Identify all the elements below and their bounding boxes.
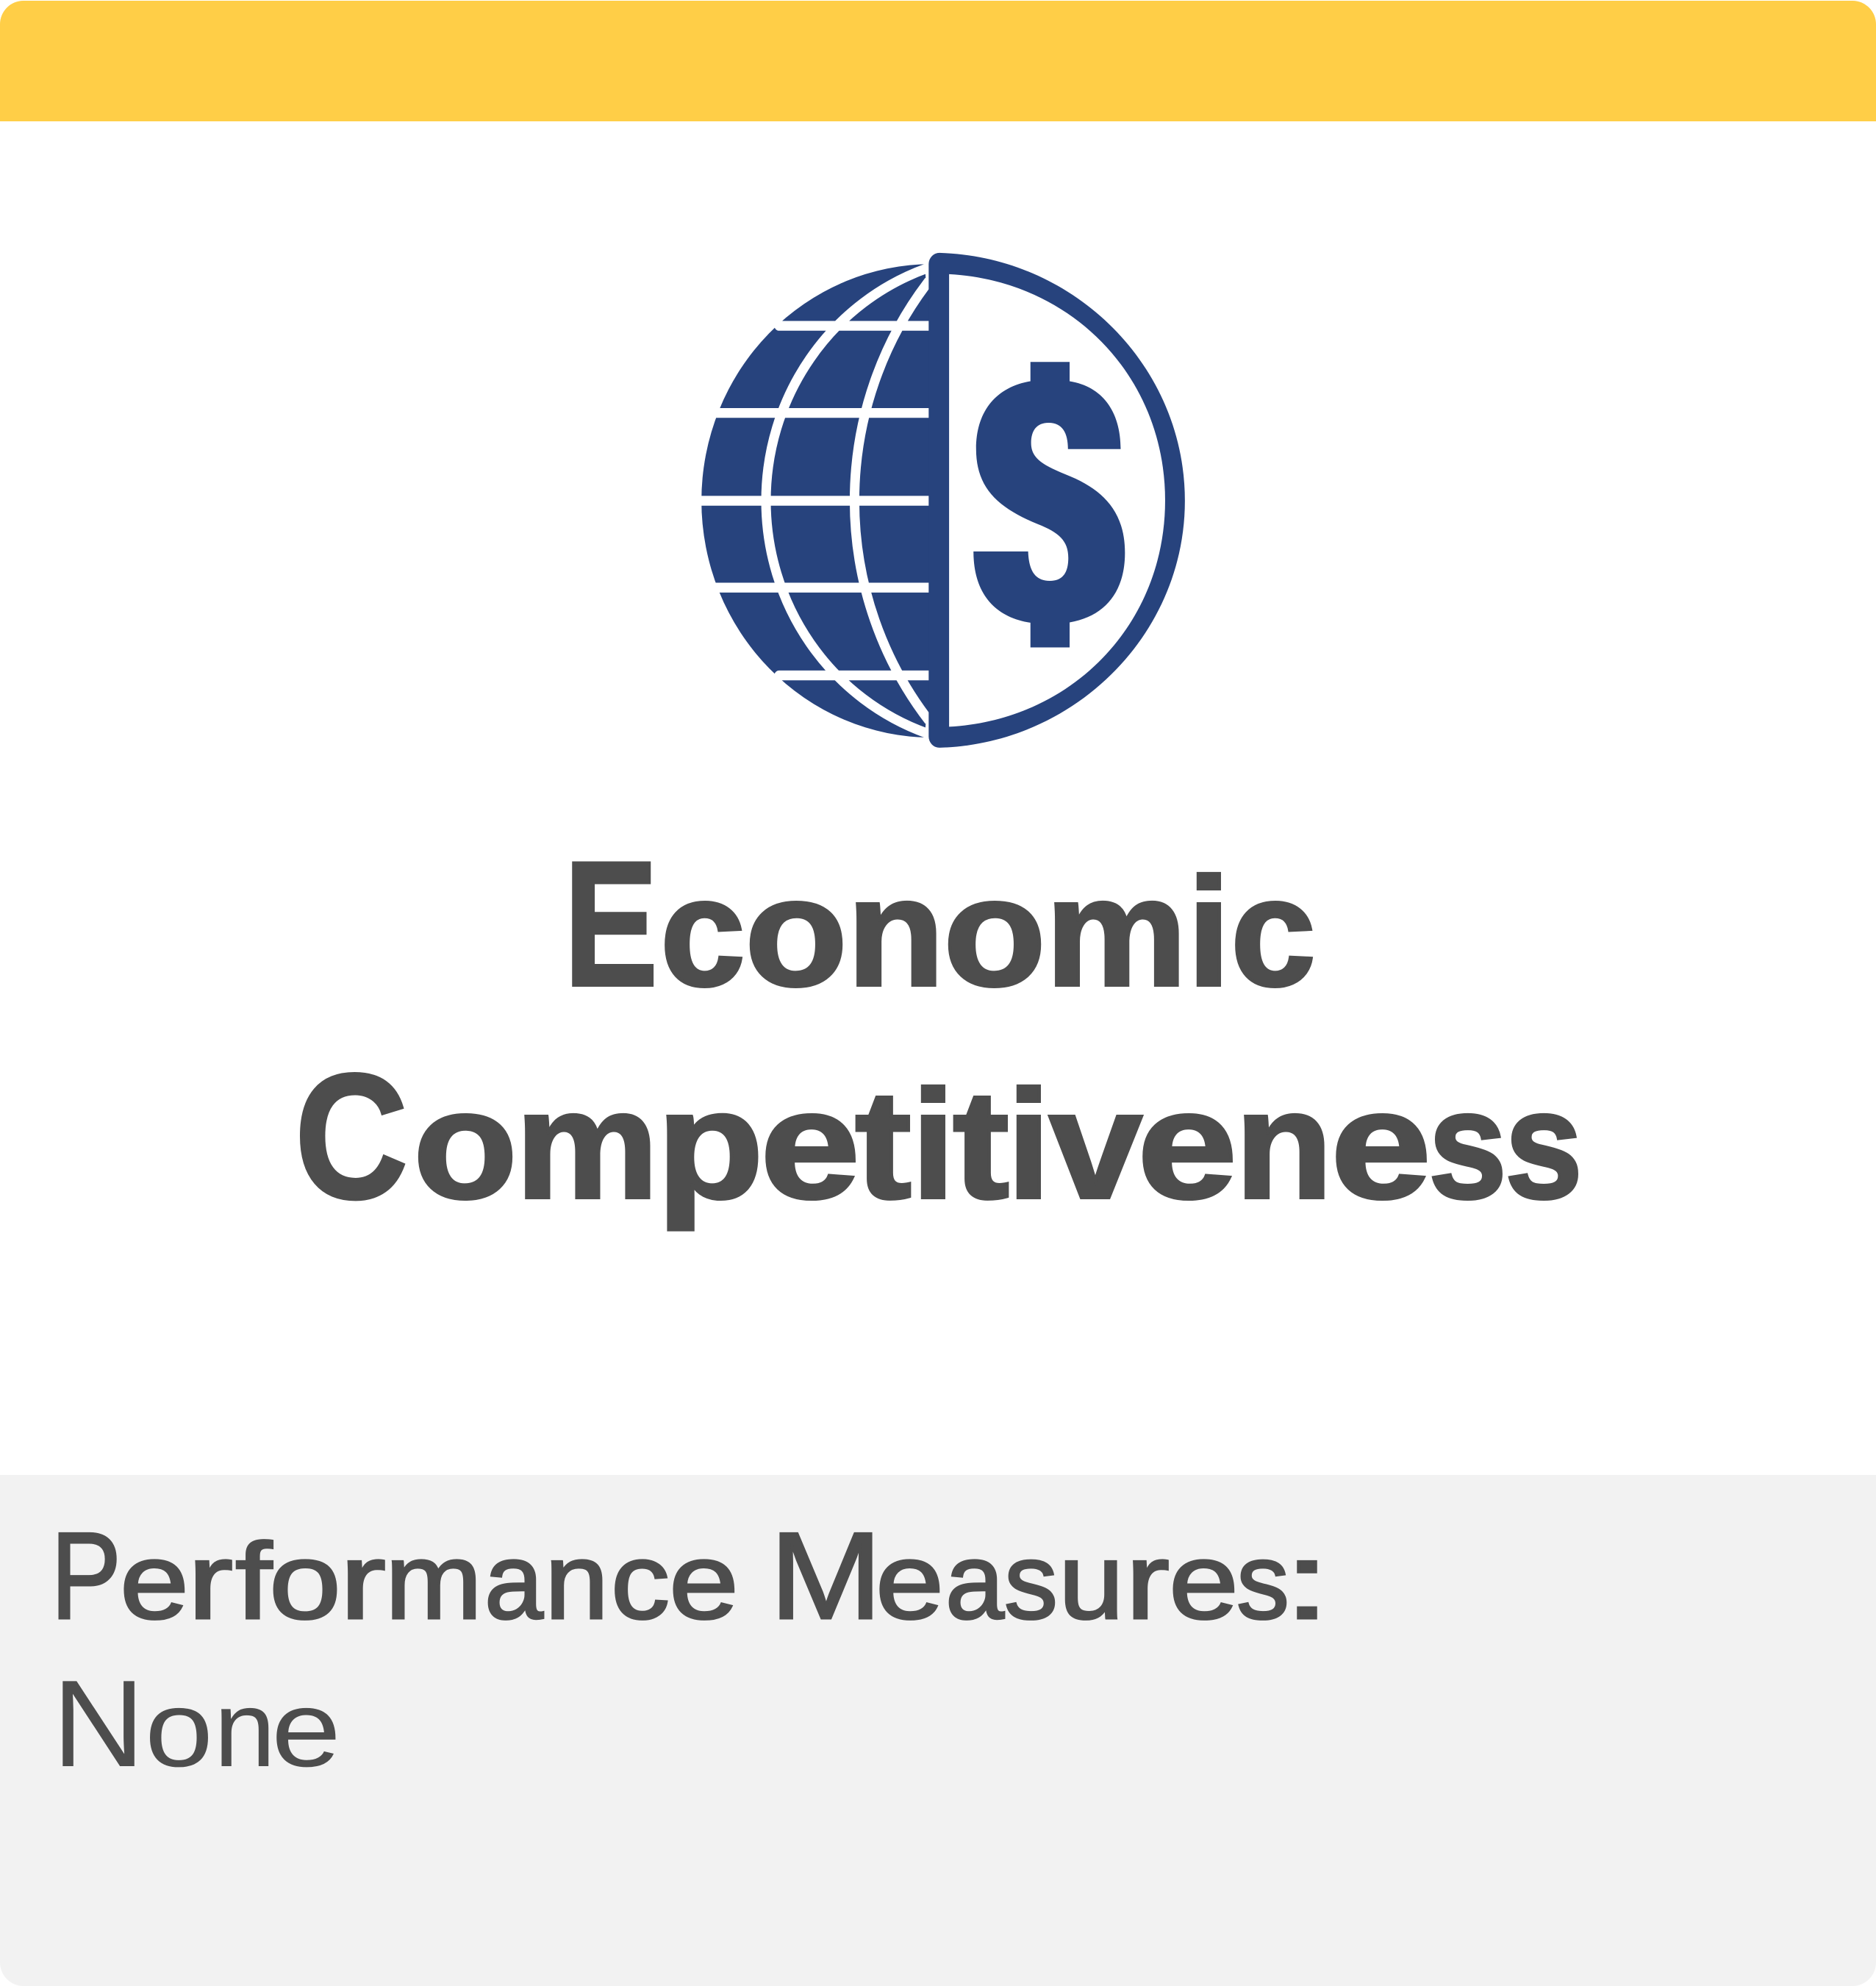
performance measures text: P (51, 1507, 121, 1645)
performance measures text: s (1004, 1521, 1058, 1642)
dollar sign (973, 362, 1125, 647)
performance measures text: r (1125, 1521, 1170, 1642)
coin half (928, 253, 1185, 748)
title: c (1231, 846, 1316, 1018)
title: C (295, 1037, 408, 1236)
title: p (656, 1058, 764, 1231)
performance measures text: a (945, 1521, 1004, 1642)
performance measures text: n (545, 1521, 609, 1642)
performance measures text: e (669, 1521, 739, 1642)
title: o (943, 846, 1046, 1018)
performance measures text: r (340, 1521, 386, 1642)
title: m (515, 1058, 659, 1231)
performance measures text: e (271, 1669, 341, 1790)
title (295, 825, 1583, 1236)
globe (701, 264, 929, 737)
title: s (1428, 1058, 1507, 1231)
title: t (953, 1058, 1009, 1231)
title: n (1235, 1058, 1333, 1231)
title: t (855, 1058, 912, 1231)
title: m (1045, 846, 1187, 1018)
performance measures text: : (1283, 1521, 1331, 1642)
title: i (1007, 1058, 1050, 1231)
title: i (1187, 846, 1231, 1018)
performance measures text: N (52, 1654, 145, 1793)
performance measures text: f (235, 1521, 273, 1642)
header bar (0, 1, 1876, 121)
title: v (1049, 1058, 1142, 1231)
performance measures text: r (187, 1521, 233, 1642)
performance measures text: s (1236, 1521, 1289, 1642)
footer panel (0, 1475, 1876, 1986)
title: e (1331, 1058, 1431, 1231)
title: c (660, 846, 745, 1018)
performance measures text: e (1169, 1521, 1239, 1642)
icon: globe with dollar (697, 253, 1185, 748)
performance measures text: a (484, 1521, 543, 1642)
performance measures text: e (876, 1521, 944, 1642)
performance measures text (51, 1507, 1331, 1793)
title: o (413, 1058, 518, 1231)
title: E (564, 825, 658, 1024)
performance measures text: u (1059, 1521, 1124, 1642)
title: n (847, 846, 945, 1018)
performance measures text: o (145, 1669, 213, 1790)
performance measures text: m (385, 1521, 482, 1642)
title: i (912, 1058, 955, 1231)
title: e (760, 1058, 860, 1231)
title: e (1137, 1058, 1237, 1231)
title: s (1505, 1058, 1583, 1231)
performance measures text: n (214, 1669, 276, 1790)
performance measures text: M (770, 1507, 882, 1645)
title: o (745, 846, 848, 1018)
performance measures text: o (269, 1521, 341, 1642)
performance measures text: e (120, 1521, 189, 1642)
performance measures text: c (611, 1521, 670, 1642)
